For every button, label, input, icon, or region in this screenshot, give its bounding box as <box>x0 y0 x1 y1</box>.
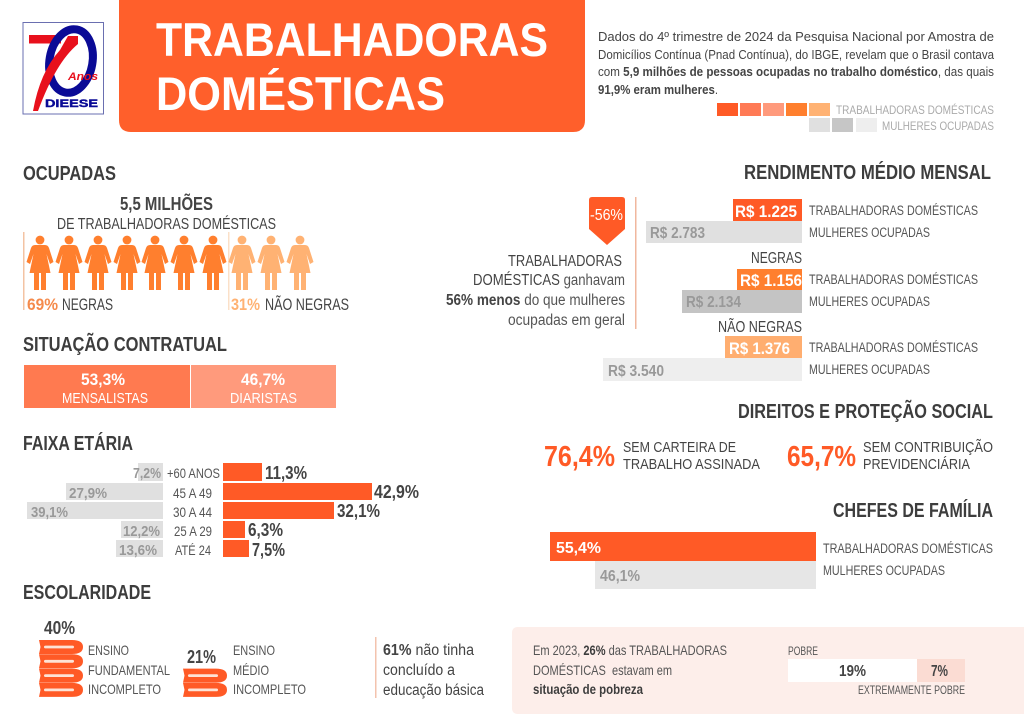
panel: situação contratual: 46,7% <box>241 370 285 389</box>
text: rendimento: DOMÉSTICAS ganhavam <box>473 272 625 289</box>
intro text <box>598 29 995 97</box>
chart: faixa etária: ATÉ 24 <box>175 542 211 558</box>
chart: rendimento: R$ 3.540 <box>608 363 664 380</box>
chart: rendimento: MULHERES OCUPADAS <box>809 294 930 309</box>
callout: 61% <box>375 637 484 699</box>
legend: TRABALHADORAS DOMÉSTICAS <box>836 102 994 117</box>
chart: rendimento: R$ 1.156 <box>740 271 802 290</box>
chart: chefes de família: MULHERES OCUPADAS <box>823 563 945 578</box>
panel: escolaridade 21%: INCOMPLETO <box>233 681 306 697</box>
logo: DIEESE 70 anos <box>23 22 104 114</box>
chart: faixa etária: 25 A 29 <box>174 523 212 539</box>
chart: faixa etária: 6,3% <box>248 520 283 540</box>
panel: pobreza <box>512 627 1024 714</box>
panel: ocupadas <box>23 193 349 314</box>
chart: faixa etária: 42,9% <box>374 482 419 502</box>
callout: 61%: concluído a <box>383 662 455 679</box>
title banner <box>119 0 585 132</box>
legend: MULHERES OCUPADAS <box>882 119 994 133</box>
chart: faixa etária: 13,6% <box>119 542 157 559</box>
stat: sem contribuição: PREVIDENCIÁRIA <box>863 456 970 473</box>
panel: escolaridade 40%: FUNDAMENTAL <box>88 662 170 678</box>
panel: pobreza: DOMÉSTICAS estavam em <box>533 662 672 678</box>
chart: chefes de família: 55,4% <box>556 540 601 557</box>
chart: faixa etária: 11,3% <box>265 463 307 483</box>
title banner: DOMÉSTICAS <box>156 67 445 120</box>
heading: faixa etária: FAIXA ETÁRIA <box>23 432 133 455</box>
chart: faixa etária: 39,1% <box>31 504 68 521</box>
panel: escolaridade 40%: 40% <box>44 618 75 638</box>
text: rendimento <box>446 197 636 329</box>
chart: rendimento: MULHERES OCUPADAS <box>809 362 930 377</box>
chart: faixa etária <box>27 463 419 560</box>
panel: pobreza: situação de pobreza <box>533 681 643 697</box>
text: rendimento: 56% menos do que mulheres <box>446 292 625 309</box>
stat: sem carteira: SEM CARTEIRA DE <box>623 440 736 456</box>
chart: faixa etária: 27,9% <box>69 485 107 502</box>
panel: escolaridade 40%: INCOMPLETO <box>88 681 161 697</box>
callout: -56%: -56% <box>590 207 623 224</box>
title banner: TRABALHADORAS <box>156 13 548 66</box>
panel: situação contratual <box>24 365 336 408</box>
chart: faixa etária: 32,1% <box>337 501 380 521</box>
panel: situação contratual: 53,3% <box>81 370 125 389</box>
panel: pobreza: EXTREMAMENTE POBRE <box>858 683 965 697</box>
callout: 61%: educação básica <box>383 682 484 699</box>
intro text: 91,9% eram mulheres. <box>598 82 718 97</box>
chart: chefes de família <box>550 532 993 589</box>
chart: faixa etária: +60 ANOS <box>167 465 220 481</box>
chart: rendimento <box>603 199 978 381</box>
stat: sem contribuição: 65,7% <box>787 441 856 473</box>
chart: faixa etária: 7,2% <box>133 465 161 482</box>
heading: escolaridade: ESCOLARIDADE <box>23 582 151 604</box>
panel: ocupadas: 31% <box>231 295 260 314</box>
chart: rendimento: R$ 1.376 <box>729 339 790 358</box>
panel: pobreza: 19% <box>839 663 866 680</box>
panel: escolaridade 21%: 21% <box>187 647 216 667</box>
chart: rendimento: TRABALHADORAS DOMÉSTICAS <box>809 340 978 355</box>
chart: rendimento: R$ 1.225 <box>735 202 797 221</box>
stat: sem carteira <box>544 440 760 473</box>
panel: situação contratual: MENSALISTAS <box>62 390 148 407</box>
panel: escolaridade 40% <box>39 618 170 697</box>
heading: ocupadas: OCUPADAS <box>23 163 116 185</box>
stat: sem contribuição <box>787 439 993 473</box>
stat: sem carteira: TRABALHO ASSINADA <box>623 457 760 473</box>
intro text: com 5,9 milhões de pessoas ocupadas no trabalho doméstico, das quais <box>598 64 994 79</box>
panel: ocupadas: DE TRABALHADORAS DOMÉSTICAS <box>57 214 276 233</box>
chart: rendimento: NEGRAS <box>751 250 802 267</box>
panel: situação contratual: DIARISTAS <box>230 390 297 407</box>
chart: chefes de família: 46,1% <box>600 568 640 585</box>
logo: DIEESE 70 anos: DIEESE <box>45 98 98 110</box>
chart: rendimento: NÃO NEGRAS <box>718 319 802 336</box>
panel: pobreza: Em 2023, 26% das TRABALHADORAS <box>533 642 727 658</box>
panel: escolaridade 21% <box>183 642 306 697</box>
panel: pobreza: 7% <box>931 663 948 680</box>
stat: sem carteira: 76,4% <box>544 441 615 473</box>
chart: faixa etária: 45 A 49 <box>173 485 212 501</box>
panel: escolaridade 21%: MÉDIO <box>233 662 269 678</box>
heading: situação contratual: SITUAÇÃO CONTRATUAL <box>23 333 227 356</box>
panel: ocupadas: 69% <box>27 295 58 314</box>
chart: rendimento: R$ 2.783 <box>650 225 705 242</box>
intro text: Dados do 4º trimestre de 2024 da Pesquisa Nacional por Amostra de <box>598 29 994 44</box>
panel: pobreza: POBRE <box>788 644 818 658</box>
panel: ocupadas: 5,5 MILHÕES <box>120 193 213 214</box>
chart: rendimento: R$ 2.134 <box>686 294 741 311</box>
logo: DIEESE 70 anos: Anos <box>67 71 98 83</box>
panel: ocupadas: NÃO NEGRAS <box>265 295 349 314</box>
callout: 61%: 61% não tinha <box>383 642 474 659</box>
callout: -56% <box>589 197 625 245</box>
text: rendimento: TRABALHADORAS <box>508 253 622 270</box>
stat: sem contribuição: SEM CONTRIBUIÇÃO <box>863 439 993 456</box>
chart: faixa etária: 7,5% <box>252 540 285 560</box>
chart: rendimento: TRABALHADORAS DOMÉSTICAS <box>809 203 978 218</box>
panel: ocupadas: NEGRAS <box>62 295 113 314</box>
panel: escolaridade 21%: ENSINO <box>233 642 275 658</box>
legend <box>717 102 994 133</box>
chart: faixa etária: 12,2% <box>123 523 160 540</box>
chart: rendimento: MULHERES OCUPADAS <box>809 225 930 240</box>
panel: escolaridade 40%: ENSINO <box>88 642 129 658</box>
chart: faixa etária: 30 A 44 <box>173 504 212 520</box>
chart: rendimento: TRABALHADORAS DOMÉSTICAS <box>809 272 978 287</box>
text: rendimento: ocupadas em geral <box>508 312 625 329</box>
